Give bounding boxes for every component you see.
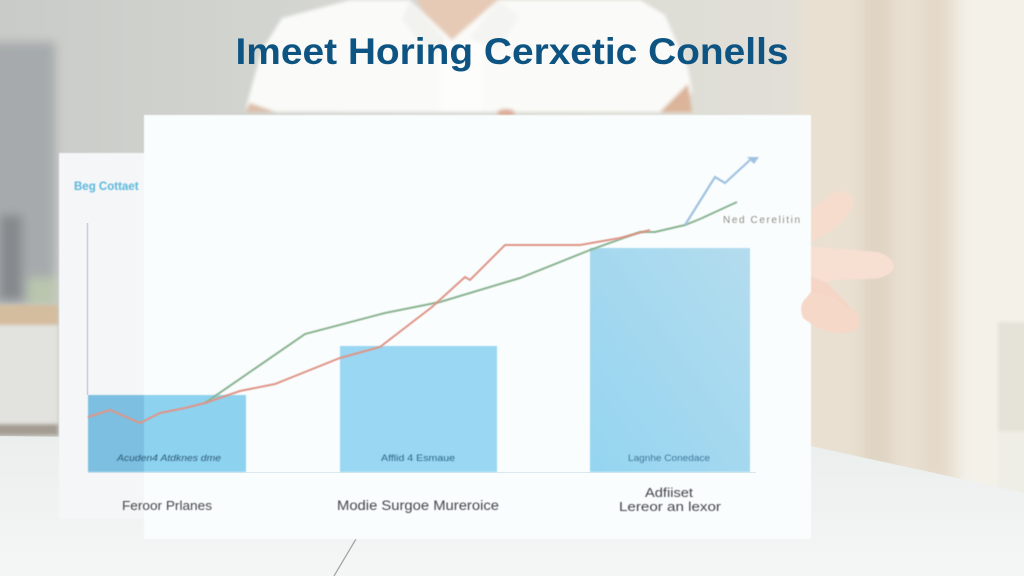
heading: back card: Beg Cottaet <box>74 181 139 193</box>
axis label 1: Feroor Prlanes <box>122 498 213 513</box>
bar label 2: Afflid 4 Esmaue <box>381 453 455 463</box>
table <box>0 436 1024 576</box>
axis: back card <box>86 223 88 395</box>
panel: main chart card <box>88 115 811 539</box>
axis label 3: Lereor an lexor <box>619 499 722 514</box>
hand: thumb over the panel <box>801 292 859 333</box>
axis label 3 <box>619 485 722 514</box>
hand: fingers behind the panel <box>805 191 894 333</box>
line: green series <box>205 202 737 403</box>
axis label 2: Modie Surgoe Mureroice <box>337 497 499 513</box>
curtains <box>800 0 1024 500</box>
bar label 3: Lagnhe Conedace <box>628 453 710 463</box>
line: red series <box>88 230 650 423</box>
bar 2 <box>340 346 497 472</box>
panel: back chart card <box>59 153 149 519</box>
baseline <box>88 472 756 474</box>
bar 1 <box>88 395 246 472</box>
line: blue series with arrow <box>685 157 759 225</box>
axis label 3: Adfiiset <box>645 485 693 500</box>
title: Imeet Horing Cerxetic Conells <box>236 31 788 72</box>
line label: Ned Cerelitin <box>723 215 800 226</box>
bar label 1: Acuden4 Atdknes dme <box>116 453 221 463</box>
person: white shirt, neck and arms <box>245 0 692 117</box>
bar 3 <box>590 248 750 472</box>
